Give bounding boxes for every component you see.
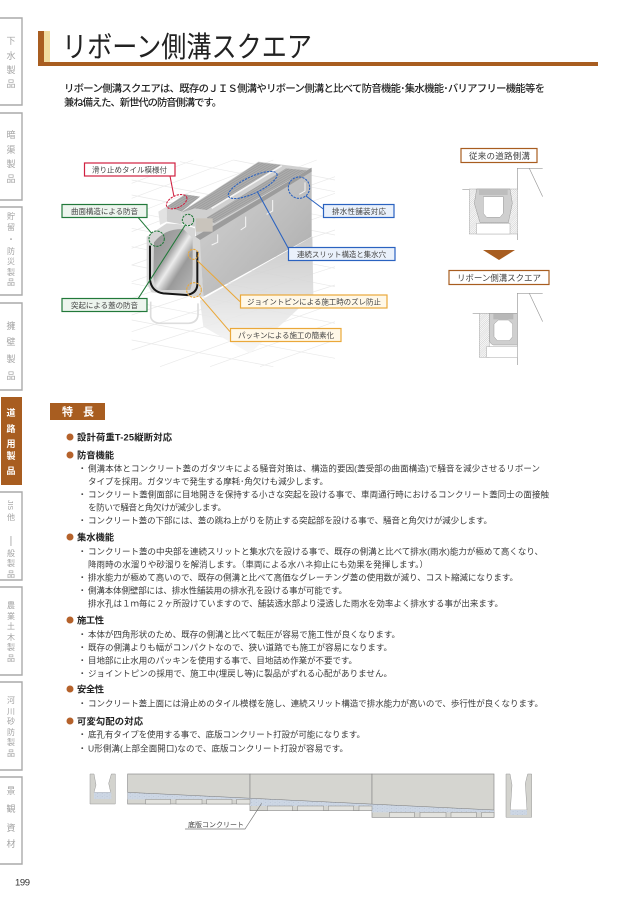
arrow: downward triangle [483, 250, 515, 260]
tab: JIS他 一般製品: 他 [7, 512, 15, 522]
feature: 防音機能: ・ [78, 490, 87, 500]
label: ジョイントピンによる施工時のズレ防止 [240, 295, 387, 308]
product diagram: channel body [147, 162, 312, 297]
label: パッキンによる施工の簡素化 [230, 328, 341, 342]
tab: 下水製品 [0, 18, 22, 105]
cross-section comparison [449, 148, 549, 365]
tab: JIS他 一般製品: JIS [6, 500, 13, 510]
section heading: 特長 [50, 403, 105, 420]
feature: 集水機能: 集水機能 [77, 532, 115, 542]
feature: 防音機能: 防音機能 [77, 450, 115, 460]
feature: 施工性: ・ [78, 642, 87, 652]
product diagram: floor [132, 160, 335, 367]
tab: 貯留・防災製品 [0, 207, 22, 295]
label: 突起による蓋の防音 [62, 298, 147, 312]
floor shadow [200, 237, 313, 353]
intro text [64, 82, 545, 109]
intro text: 兼ね備えた、新世代の防音側溝です。 [64, 96, 222, 109]
feature: 施工性: ・ [78, 668, 87, 678]
label: 従来の道路側溝 [461, 148, 537, 162]
feature: 施工性: ・ [78, 656, 87, 666]
feature: 可変勾配の対応: 可変勾配の対応 [77, 716, 144, 726]
tab: 農業土木製品: 農業土木製品 [7, 600, 15, 663]
feature: 可変勾配の対応: ・ [78, 730, 87, 740]
inner channel [153, 229, 193, 290]
tab: 農業土木製品 [0, 587, 22, 675]
label: 滑り止めタイル模様付 [84, 163, 175, 176]
feature: 集水機能: コンクリート蓋の中央部を連続スリットと集水穴を設ける事で、既存の側溝と比べて排水(雨水)能力が極めて高くなり、 [88, 546, 543, 556]
feature: 集水機能: ・ [78, 546, 87, 556]
feature: 防音機能 [66, 450, 549, 526]
label: 曲面構造による防音: 曲面構造による防音 [71, 206, 138, 216]
feature: 集水機能: 降雨時の水溜りや砂溜りを解消します。（車両による水ハネ抑止にも効果を発揮します。） [88, 560, 428, 570]
label: 滑り止めタイル模様付: 滑り止めタイル模様付 [92, 164, 168, 174]
tab: 貯留・防災製品: 貯留・防災製品 [7, 212, 15, 287]
front cover piece [167, 194, 200, 212]
black gasket [150, 246, 197, 295]
label: リボーン側溝スクエア: リボーン側溝スクエア [457, 273, 541, 283]
feature: 防音機能: コンクリート蓋側面部に目地開きを保持する小さな突起を設ける事で、車両通行時におけるコンクリート蓋同士の面接触 [88, 490, 549, 500]
side face [199, 170, 312, 297]
feature: 防音機能: ・ [78, 516, 87, 526]
feature: 可変勾配の対応: U形側溝(上部全面開口)なので、底版コンクリート打設が容易です。 [88, 744, 348, 754]
feature: 安全性: ・ [78, 698, 87, 708]
tab: 河川砂防製品 [0, 682, 22, 770]
label: 連続スリット構造と集水穴 [288, 248, 395, 260]
label: ジョイントピンによる施工時のズレ防止: ジョイントピンによる施工時のズレ防止 [247, 296, 382, 306]
label: パッキンによる施工の簡素化: パッキンによる施工の簡素化 [238, 330, 334, 340]
feature: 集水機能: ・ [78, 572, 87, 582]
page number: 199 [15, 878, 30, 888]
title: リボーン側溝スクエア [62, 31, 312, 64]
label: リボーン側溝スクエア [449, 270, 549, 284]
tab: 景観資材: 景観資材 [6, 786, 16, 849]
feature: 可変勾配の対応: ・ [78, 744, 87, 754]
tab: 河川砂防製品: 河川砂防製品 [7, 695, 15, 758]
feature: 防音機能: タイプを採用。ガタツキで発生する摩耗･角欠けも減少します。 [88, 476, 328, 486]
feature: 可変勾配の対応 [66, 716, 365, 754]
side tabs [0, 18, 22, 864]
feature: 設計荷重: 設計荷重T-25縦断対応 [77, 432, 173, 442]
label: 排水性舗装対応: 排水性舗装対応 [332, 206, 386, 216]
label: 曲面構造による防音 [62, 204, 147, 218]
road lines: reborn [473, 293, 543, 365]
callout markers and leaders [138, 166, 323, 332]
feature: 施工性 [66, 614, 400, 678]
label: 従来の道路側溝: 従来の道路側溝 [469, 151, 530, 161]
section: reborn square channel [479, 313, 517, 357]
front face [147, 223, 203, 297]
feature: 可変勾配の対応: 底孔有タイプを使用する事で、底版コンクリート打設が可能になります。 [88, 730, 365, 740]
bottom cells [146, 799, 494, 817]
feature: 防音機能: 側溝本体とコンクリート蓋のガタツキによる騒音対策は、構造的要因(蓋受部の曲面構造)で騒音を減少させるリボーン [88, 464, 540, 474]
tab: 景観資材 [0, 777, 22, 864]
tab: 暗渠製品 [0, 113, 22, 200]
feature: 集水機能: ・ [78, 586, 87, 596]
left channel end section [90, 774, 115, 804]
bottom longitudinal section diagram [90, 774, 532, 829]
feature: 集水機能: 排水能力が極めて高いので、既存の側溝と比べて高価なグレーチング蓋の使用数が減り、コスト縮減になります。 [88, 572, 518, 582]
feature: 施工性: 目地部に止水用のパッキンを使用する事で、目地詰め作業が不要です。 [88, 656, 357, 666]
feature: 施工性: 本体が四角形状のため、既存の側溝と比べて転圧が容易で施工性が良くなります。 [88, 630, 400, 640]
section: conventional channel [469, 189, 518, 234]
tab: 道路用製品 active: 道路用製品 [6, 407, 16, 476]
tile strips [182, 162, 282, 212]
tab: 道路用製品 active [1, 397, 22, 485]
label: 連続スリット構造と集水穴: 連続スリット構造と集水穴 [297, 249, 386, 259]
road lines: conventional [462, 168, 543, 240]
tab: 擁壁製品 [0, 303, 22, 390]
feature: 防音機能: を防いで騒音と角欠けが減少します。 [88, 502, 226, 512]
feature: 防音機能: コンクリート蓋の下部には、蓋の跳ね上がりを防止する突起部を設ける事で、騒音と角欠けが減少します。 [88, 516, 492, 526]
label: 排水性舗装対応 [324, 204, 394, 218]
base concrete wedge [128, 792, 494, 812]
feature: 施工性: ・ [78, 630, 87, 640]
label: 底版コンクリート: 底版コンクリート [188, 820, 244, 829]
feature: 安全性: コンクリート蓋上面には滑止めのタイル模様を施し、連続スリット構造で排水能力が高いので、歩行性が良くなります。 [88, 698, 543, 708]
longitudinal gray panels [128, 774, 494, 817]
reflection [151, 302, 198, 323]
tab: 擁壁製品: 擁壁製品 [6, 320, 16, 381]
feature: 集水機能: 排水孔は１ｍ毎に２ヶ所設けていますので、舗装透水部より浸透した雨水を効率よく排水する事が出来ます。 [88, 598, 503, 608]
feature: 集水機能: 側溝本体側壁部には、排水性舗装用の排水孔を設ける事が可能です。 [88, 586, 347, 596]
tab: JIS他 一般製品: 般製品 [7, 548, 15, 579]
leader: base concrete [185, 803, 262, 829]
label: 突起による蓋の防音: 突起による蓋の防音 [71, 300, 138, 310]
feature: 集水機能 [66, 532, 543, 608]
top surface [182, 162, 312, 237]
intro text: リボーン側溝スクエアは、既存のＪＩＳ側溝やリボーン側溝と比べて防音機能･集水機能･バリアフリー機能等を [64, 82, 545, 95]
feature: 施工性: 既存の側溝よりも幅がコンパクトなので、狭い道路でも施工が容易になります。 [88, 642, 392, 652]
right channel end section [506, 774, 532, 817]
feature: 施工性: ジョイントピンの採用で、施工中(埋戻し等)に製品がずれる心配がありません。 [88, 668, 392, 678]
tab: 暗渠製品: 暗渠製品 [6, 130, 16, 184]
tab: JIS他 一般製品 [0, 492, 22, 580]
tab: 下水製品: 下水製品 [6, 36, 16, 89]
drain marks [212, 182, 305, 245]
feature: 安全性 [66, 684, 543, 708]
feature: 安全性: 安全性 [77, 684, 104, 694]
section heading: 特長: 特 長 [62, 404, 94, 418]
feature: 防音機能: ・ [78, 464, 87, 474]
title [38, 31, 598, 66]
feature: 施工性: 施工性 [77, 614, 104, 626]
floor grid [132, 160, 335, 367]
